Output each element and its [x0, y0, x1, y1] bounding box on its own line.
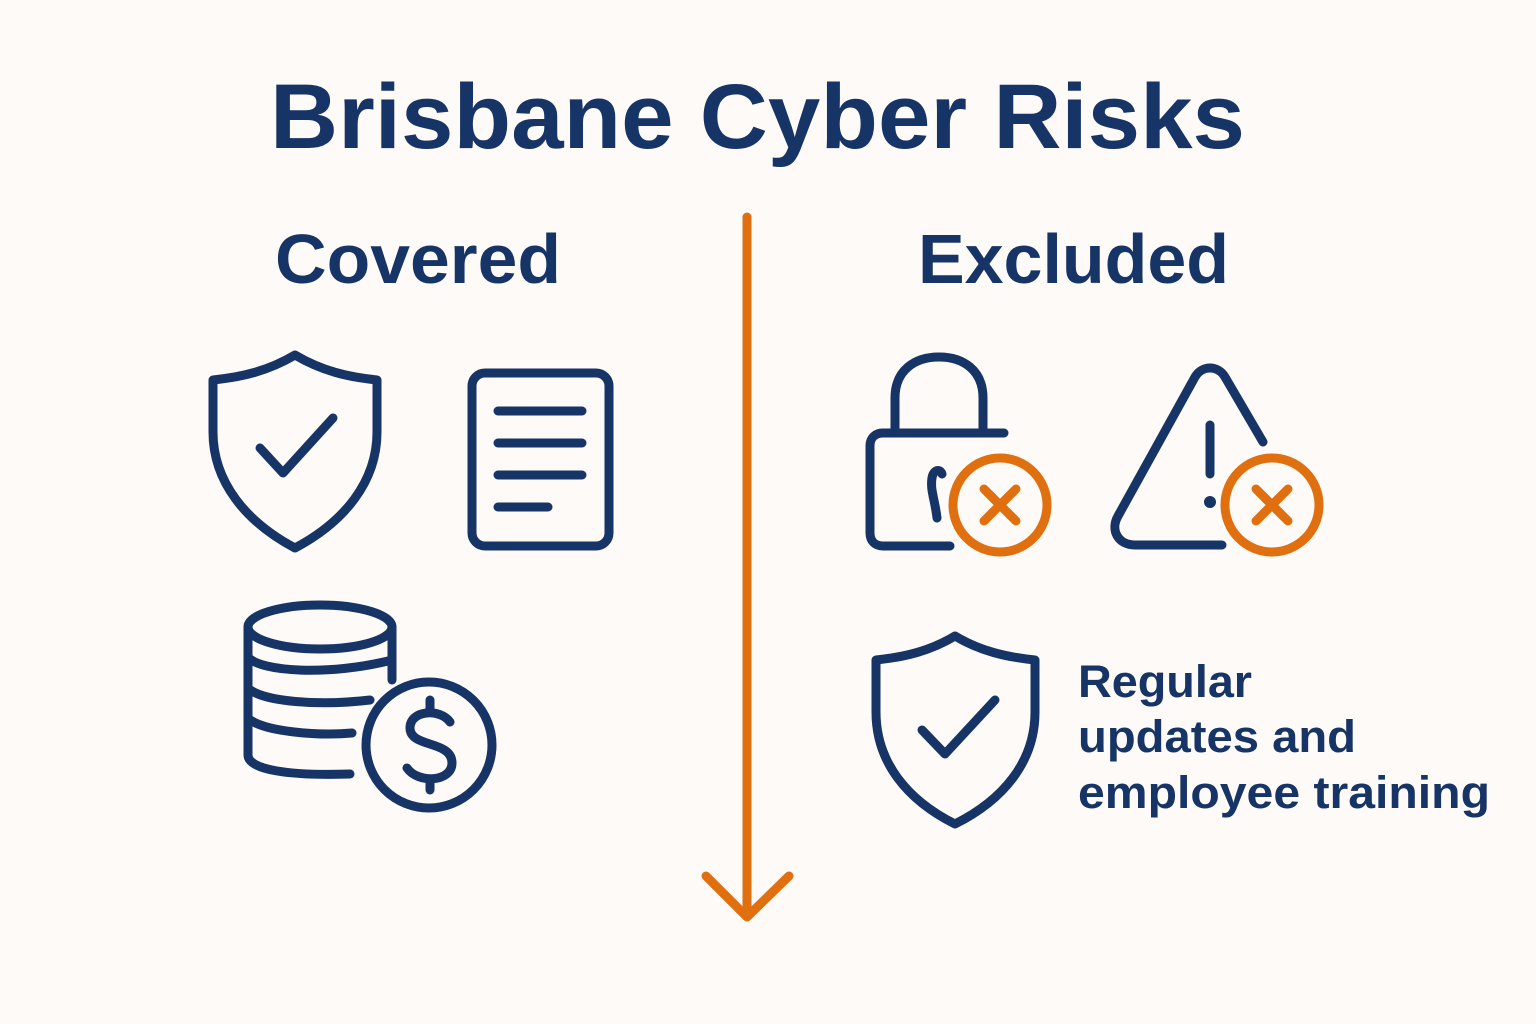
- arrow: divider: [706, 217, 789, 917]
- icon: shield mitigation: [876, 636, 1035, 824]
- icon: coins with dollar: [248, 605, 492, 808]
- title: Brisbane Cyber Risks: [270, 66, 1245, 168]
- icon: shield covered: [213, 355, 377, 548]
- text: mitigation: employee training: [1078, 767, 1490, 818]
- text: mitigation: updates and: [1078, 711, 1356, 762]
- icon: lock excluded: [870, 357, 1047, 552]
- text: mitigation: [1078, 656, 1490, 818]
- text: mitigation: Regular: [1078, 656, 1252, 707]
- heading: covered: Covered: [275, 220, 561, 298]
- icon: document: [472, 373, 609, 546]
- heading: excluded: Excluded: [918, 220, 1229, 298]
- icon: warning excluded: [1115, 368, 1319, 552]
